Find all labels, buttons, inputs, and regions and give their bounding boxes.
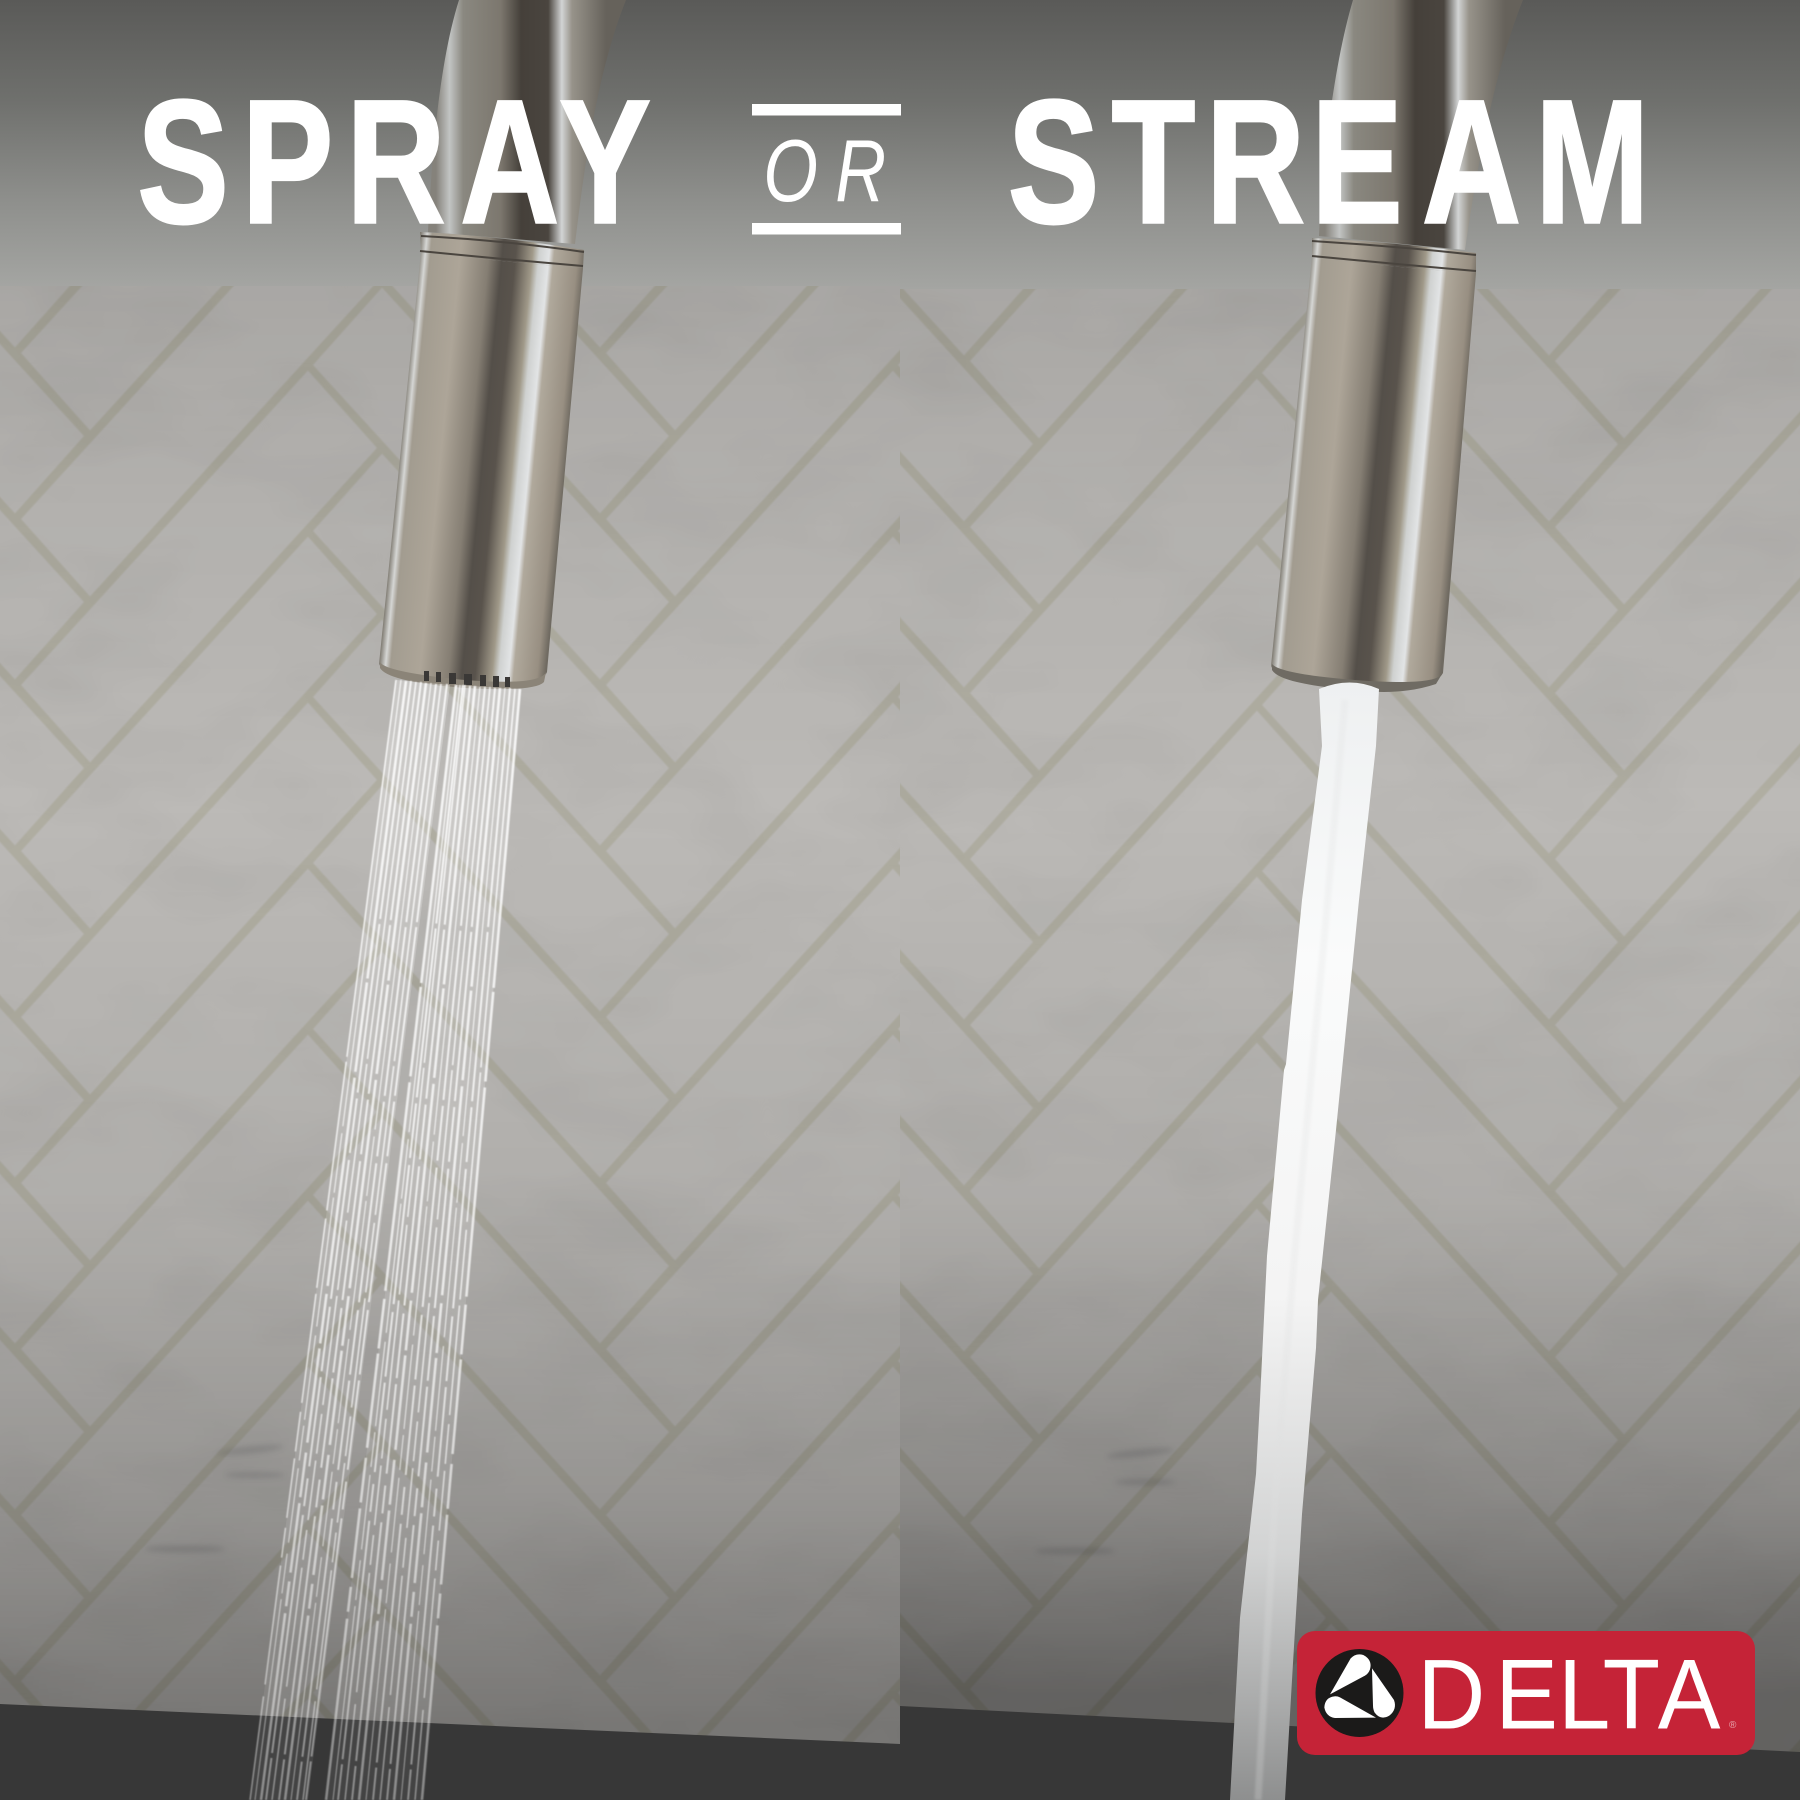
icon: delta triangle mark xyxy=(1316,1649,1404,1737)
spout pipe xyxy=(428,0,626,244)
collar ring xyxy=(1312,238,1476,273)
faucet, left xyxy=(379,0,626,689)
spray of water, left xyxy=(250,680,520,1800)
soffit band under cabinet, right xyxy=(900,0,1800,289)
countertop, left xyxy=(0,1704,900,1800)
or divider: OR xyxy=(763,121,886,220)
spout pipe xyxy=(1319,0,1523,250)
logo: Delta badge: ® xyxy=(1729,1720,1737,1731)
faucet head cylinder xyxy=(1271,257,1476,687)
or divider xyxy=(752,104,901,234)
nozzle rim xyxy=(380,662,546,689)
faucet, right xyxy=(1271,0,1523,692)
panel: spray photo (left) xyxy=(0,0,900,1800)
stream of water, right xyxy=(1230,682,1379,1800)
logo: Delta badge xyxy=(1297,1631,1755,1755)
tile backsplash wall, right xyxy=(900,289,1800,1752)
collar ring xyxy=(420,232,584,268)
title: SPRAY: SPRAY xyxy=(137,64,651,260)
countertop, right xyxy=(900,1706,1800,1800)
tile backsplash wall, left xyxy=(0,286,900,1744)
logo: Delta badge: DELTA xyxy=(1417,1640,1721,1750)
faucet head cylinder xyxy=(379,252,583,687)
panel: stream photo (right) xyxy=(900,0,1800,1800)
soffit band under cabinet, left xyxy=(0,0,900,286)
nozzle rim xyxy=(1272,664,1442,692)
title: STREAM: STREAM xyxy=(1008,64,1649,260)
